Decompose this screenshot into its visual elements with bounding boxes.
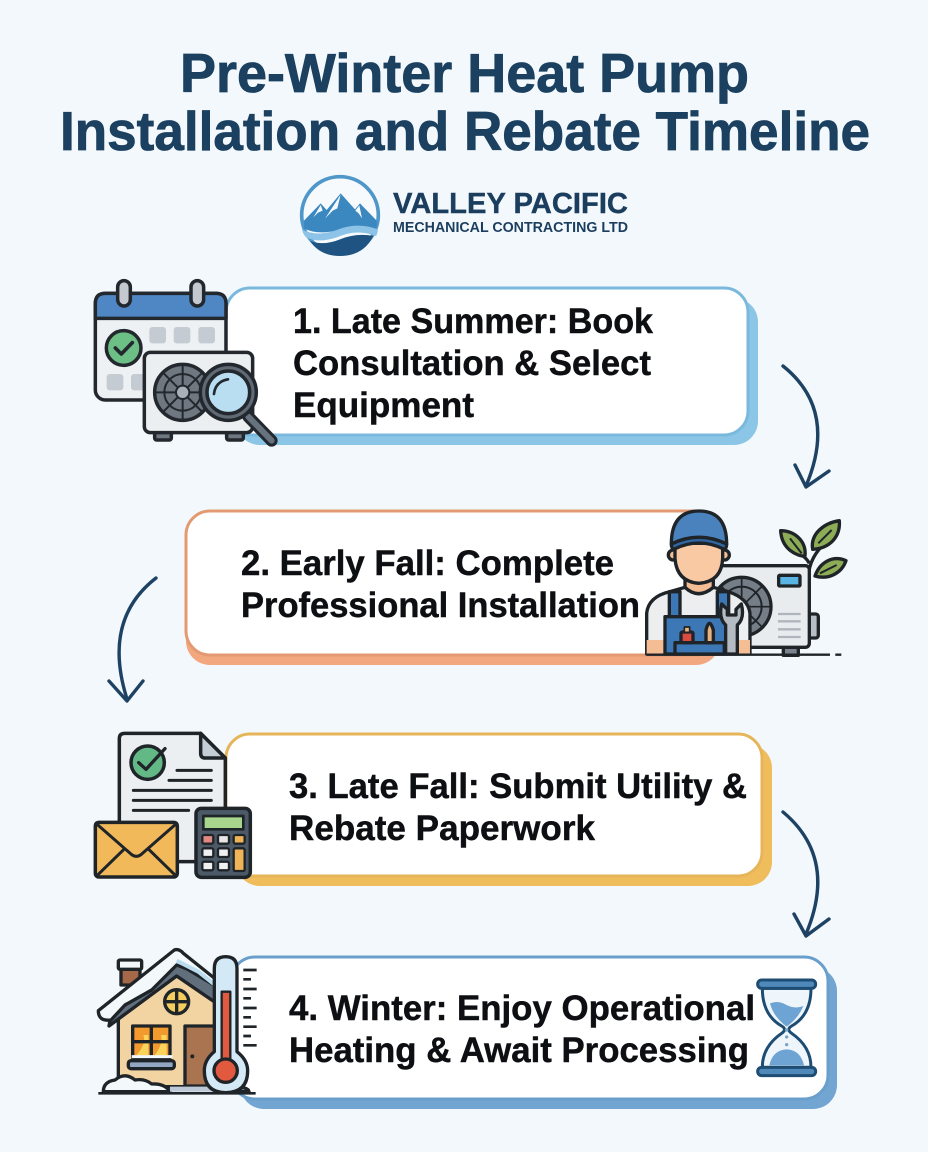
step 3 text bbox=[289, 767, 747, 848]
logo: Valley Pacific bbox=[302, 177, 628, 256]
step 1 text: 1. Late Summer: Book bbox=[293, 302, 654, 341]
step 1 text: Equipment bbox=[293, 386, 474, 425]
title: Pre-Winter Heat Pump bbox=[180, 42, 749, 104]
step 2 text bbox=[241, 544, 640, 625]
icon: calendar and inspected outdoor unit bbox=[95, 281, 272, 441]
step 3 text: 3. Late Fall: Submit Utility & bbox=[289, 767, 747, 806]
icon: rebate paperwork, envelope and calculator bbox=[95, 733, 250, 877]
title: Installation and Rebate Timeline bbox=[60, 100, 870, 162]
arrow: step 3 to step 4 bbox=[783, 812, 829, 936]
panel: step 4 bbox=[231, 957, 837, 1109]
title bbox=[60, 42, 870, 162]
panel: step 1 bbox=[226, 288, 758, 445]
arrow: step 1 to step 2 bbox=[783, 366, 829, 487]
logo: Valley Pacific: MECHANICAL CONTRACTING LTD bbox=[393, 220, 628, 236]
step 3 text: Rebate Paperwork bbox=[289, 809, 596, 848]
step 4 text: 4. Winter: Enjoy Operational bbox=[289, 989, 755, 1028]
arrow: step 2 to step 3 bbox=[109, 578, 156, 701]
step 4 text: Heating & Await Processing bbox=[289, 1031, 749, 1070]
panel: step 2 bbox=[186, 511, 720, 665]
step 1 text bbox=[293, 302, 654, 425]
panel: step 3 bbox=[226, 734, 772, 886]
logo: Valley Pacific: VALLEY PACIFIC bbox=[393, 188, 628, 220]
step 1 text: Consultation & Select bbox=[293, 344, 651, 383]
icon: technician with heat pump and leaves bbox=[647, 511, 846, 655]
step 2 text: Professional Installation bbox=[241, 586, 640, 625]
icon: hourglass bbox=[758, 980, 816, 1076]
icon: snowy house with thermometer bbox=[98, 950, 257, 1093]
step 2 text: 2. Early Fall: Complete bbox=[241, 544, 614, 583]
step 4 text bbox=[289, 989, 755, 1070]
